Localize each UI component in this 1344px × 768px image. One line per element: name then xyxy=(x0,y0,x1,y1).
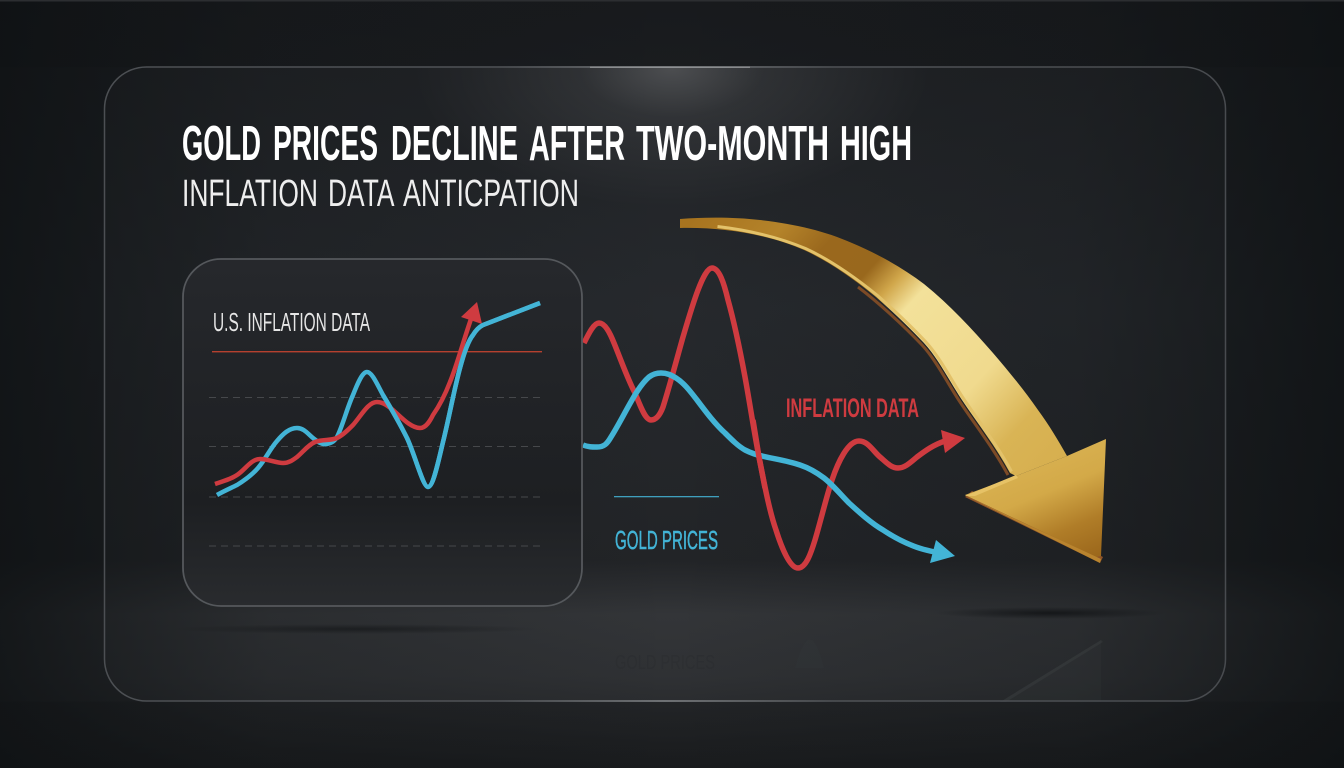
threshold line xyxy=(212,351,542,352)
floor reflection text: GOLD PRICES xyxy=(615,652,715,674)
arrow shaft lower bevel xyxy=(858,287,1008,475)
arrow: red line head xyxy=(941,430,965,453)
arrow head underside xyxy=(965,491,1103,563)
title: PRICES xyxy=(273,117,378,171)
grid lines xyxy=(209,398,542,546)
floor shadow under gold arrow xyxy=(935,607,1165,619)
panel: main glass card xyxy=(104,66,1226,701)
subtitle: DATA xyxy=(328,173,395,215)
red re-crossing segment over blue xyxy=(753,420,765,488)
label: U.S. inflation data: U.S. INFLATION DATA xyxy=(213,307,370,337)
title: HIGH xyxy=(840,117,912,171)
arrow shaft highlight edge xyxy=(718,226,1012,472)
arrow head xyxy=(965,439,1106,557)
arrow shaft xyxy=(680,218,1067,476)
title: GOLD xyxy=(182,117,261,171)
chart: main red inflation line xyxy=(584,268,965,568)
label: inflation data: INFLATION DATA xyxy=(786,393,919,423)
icon: gold down arrow xyxy=(680,218,1106,563)
subtitle: ANTICPATION xyxy=(403,173,579,215)
subtitle: INFLATION xyxy=(182,173,318,215)
floor reflection of gold arrow xyxy=(795,639,1103,702)
title: DECLINE xyxy=(391,117,518,171)
chart: main blue gold-price line xyxy=(583,373,955,563)
floor shadow under inner card xyxy=(170,624,540,634)
panel: U.S. inflation data inner card xyxy=(183,259,582,606)
title: TWO-MONTH xyxy=(636,117,829,171)
arrow head lower lip xyxy=(966,496,1101,563)
arrow: inner red line head xyxy=(461,302,482,324)
legend rule: gold prices xyxy=(614,496,719,497)
arrow: blue line head xyxy=(930,540,955,563)
chart: inner blue line xyxy=(217,303,540,495)
chart: inner red line xyxy=(215,316,472,484)
title: AFTER xyxy=(529,117,625,171)
arrow head front edge xyxy=(965,475,1018,496)
chart: inner blue overlap xyxy=(383,303,540,487)
label: gold prices: GOLD PRICES xyxy=(615,525,718,555)
